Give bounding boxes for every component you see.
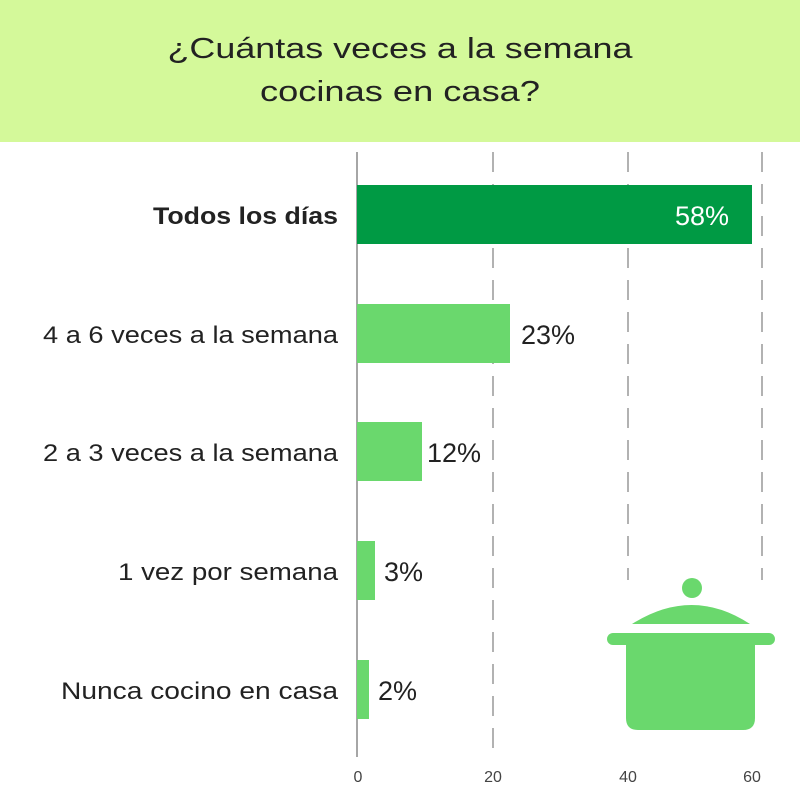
bar: 2 a 3 veces: 2 a 3 veces a la semana: [43, 440, 339, 467]
bar: Nunca: [61, 660, 417, 719]
title: [168, 33, 634, 108]
axis labels: 20: [484, 769, 502, 786]
bar: Nunca: 2%: [378, 676, 417, 706]
axis labels: 40: [619, 769, 637, 786]
title: ¿Cuántas veces a la semana: [168, 33, 634, 65]
axis line: [356, 152, 358, 757]
bar: Todos los días: 58%: [675, 201, 729, 231]
bar: Todos los días: [153, 185, 752, 244]
bar: 1 vez: [118, 541, 423, 600]
axis labels: 60: [743, 769, 761, 786]
bar: Nunca: Nunca cocino en casa: [61, 678, 339, 705]
axis labels: 0: [354, 769, 363, 786]
bar: 4 a 6 veces: [43, 304, 575, 363]
bar chart: [43, 185, 752, 719]
icon: cooking pot: [607, 578, 775, 730]
bar: 4 a 6 veces: 23%: [521, 320, 575, 350]
bar: 4 a 6 veces: 4 a 6 veces a la semana: [43, 322, 339, 349]
bar: 1 vez: 3%: [384, 557, 423, 587]
bar: 2 a 3 veces: [43, 422, 481, 481]
bar: 1 vez: 1 vez por semana: [118, 559, 339, 586]
axis labels: [354, 769, 761, 786]
title: cocinas en casa?: [260, 76, 540, 108]
header: [0, 0, 800, 142]
bar: 2 a 3 veces: 12%: [427, 438, 481, 468]
bar: Todos los días: Todos los días: [153, 203, 338, 230]
